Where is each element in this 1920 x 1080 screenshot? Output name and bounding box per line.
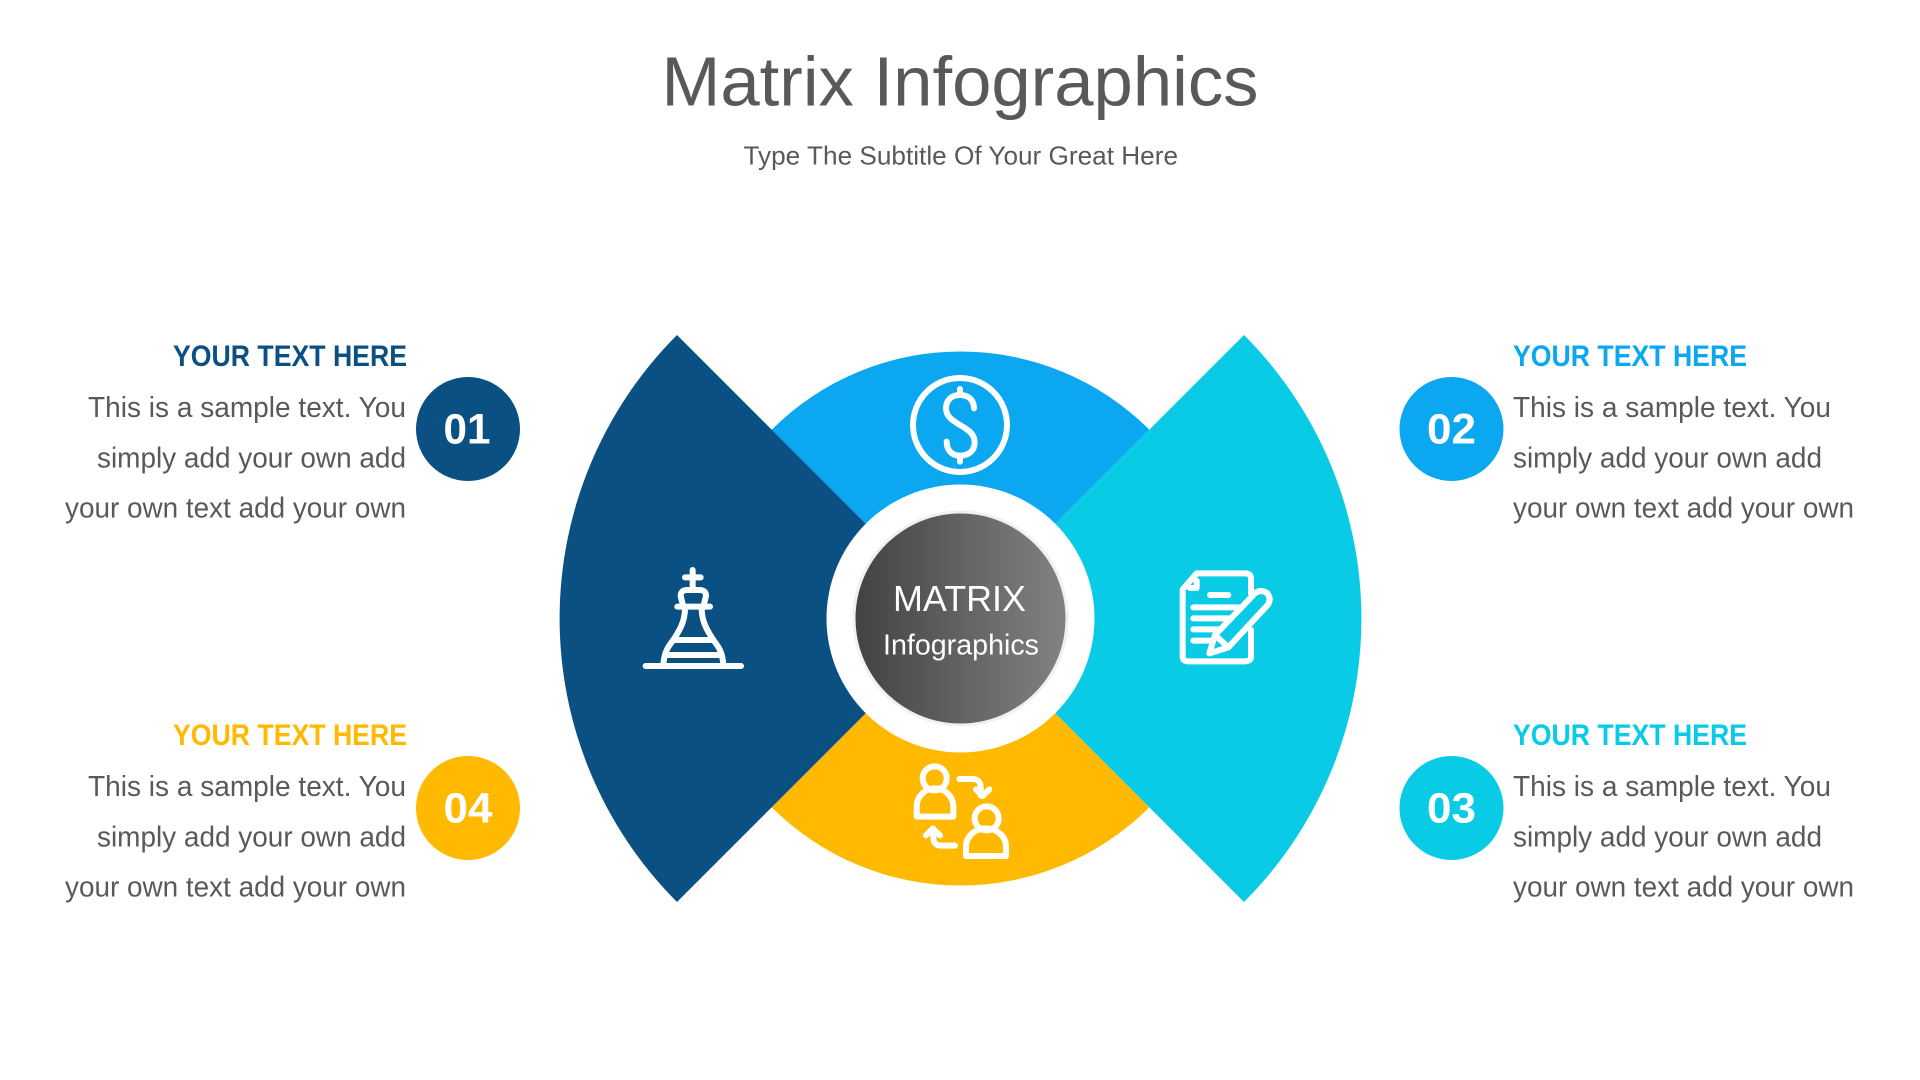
heading 04: YOUR TEXT HERE	[173, 719, 407, 752]
body text 03	[1513, 771, 1854, 904]
icon: document and pencil	[1183, 573, 1270, 661]
body text 01	[65, 392, 406, 524]
body text 04	[65, 771, 406, 904]
segment: right cyan	[960, 335, 1361, 902]
subtitle: Type The Subtitle Of Your Great Here	[744, 140, 1178, 170]
badge 01: 01	[444, 406, 490, 454]
center white ring	[826, 484, 1094, 752]
item 04	[65, 719, 520, 904]
center label: MATRIX: MATRIX	[893, 578, 1026, 619]
item 01	[65, 340, 520, 524]
icon: dollar coin	[913, 378, 1007, 472]
heading 02: YOUR TEXT HERE	[1513, 340, 1747, 373]
body text 04: simply add your own add	[97, 822, 406, 854]
body text 03: This is a sample text. You	[1513, 771, 1831, 803]
title: Matrix Infographics	[662, 42, 1258, 120]
body text 04: This is a sample text. You	[88, 771, 406, 803]
badge 03: 03	[1427, 784, 1476, 832]
icon: people exchange	[917, 766, 1006, 856]
center label: Infographics: Infographics	[883, 630, 1039, 662]
body text 03: simply add your own add	[1513, 822, 1822, 854]
heading 03: YOUR TEXT HERE	[1513, 719, 1747, 752]
matrix diagram	[560, 335, 1361, 902]
body text 02: This is a sample text. You	[1513, 392, 1831, 424]
item 02	[1400, 340, 1854, 524]
badge 04	[416, 756, 520, 860]
body text 01: simply add your own add	[97, 442, 406, 474]
segment: left navy	[560, 335, 960, 902]
heading 01: YOUR TEXT HERE	[173, 340, 407, 373]
icon: chess king	[646, 570, 741, 666]
center grey disc	[856, 514, 1066, 724]
segment: bottom yellow	[772, 618, 1149, 886]
body text 03: your own text add your own	[1513, 872, 1854, 904]
body text 01: This is a sample text. You	[88, 392, 406, 424]
body text 01: your own text add your own	[65, 492, 406, 524]
badge 01	[416, 377, 520, 481]
body text 02	[1513, 392, 1854, 524]
badge 03	[1400, 756, 1504, 860]
badge 02	[1400, 377, 1504, 481]
body text 04: your own text add your own	[65, 872, 406, 904]
badge 02: 02	[1427, 406, 1476, 454]
body text 02: your own text add your own	[1513, 492, 1854, 524]
center light ring	[852, 510, 1068, 726]
segment: top blue	[772, 351, 1149, 618]
item 03	[1400, 719, 1854, 904]
body text 02: simply add your own add	[1513, 442, 1822, 474]
badge 04: 04	[444, 784, 493, 832]
